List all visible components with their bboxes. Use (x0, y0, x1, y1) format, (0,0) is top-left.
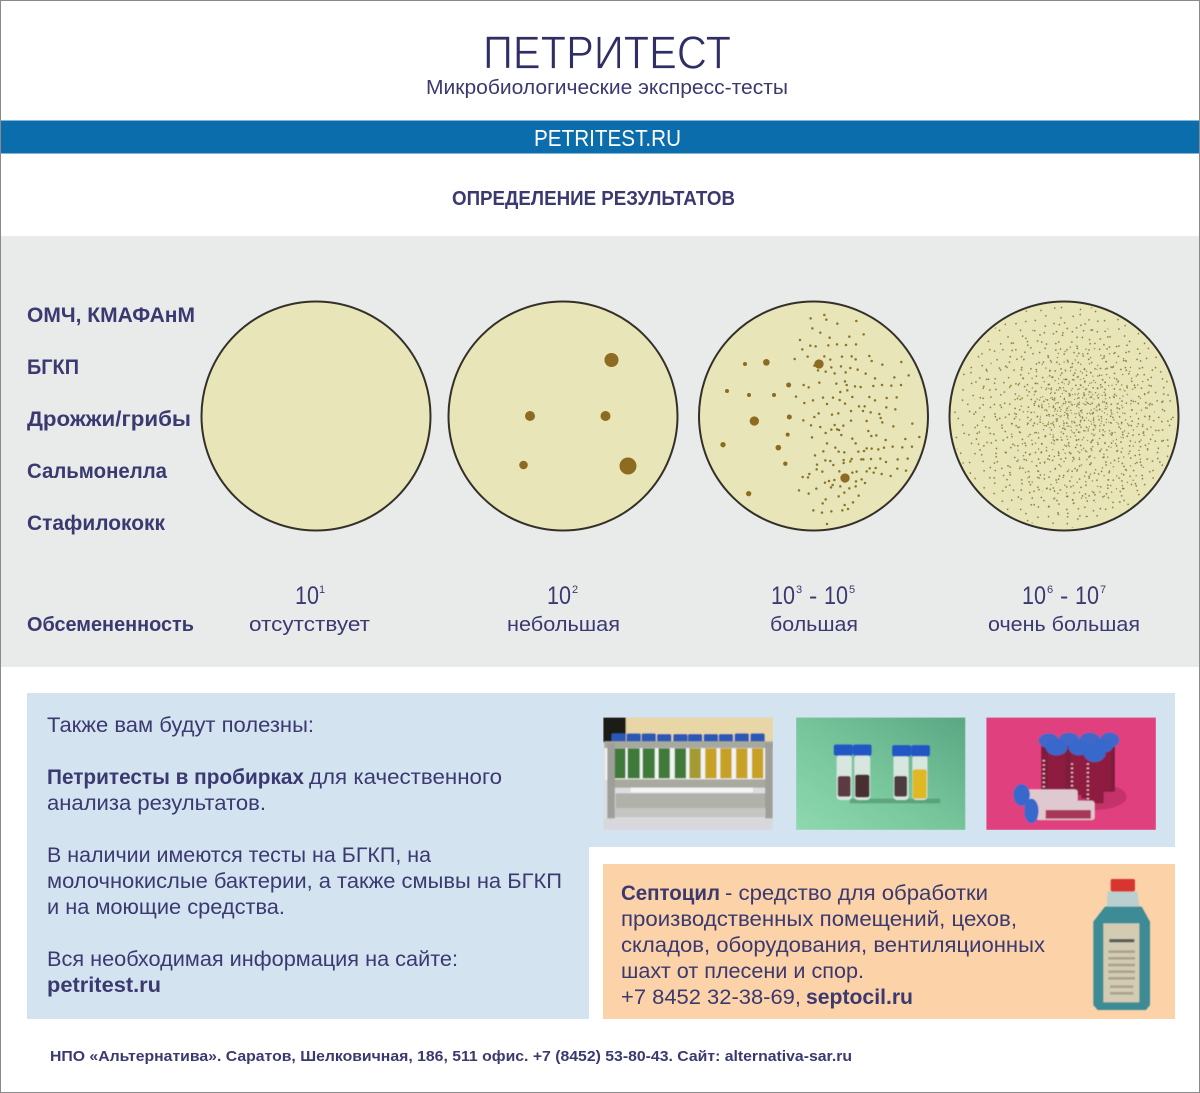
panel: septocil (603, 864, 1175, 1019)
panel: septocil: +7 8452 32-38-69, (621, 986, 801, 1009)
photo: tubes on pink (986, 717, 1156, 830)
panel: septocil: складов, оборудования, вентиляционных (621, 934, 1046, 957)
panel: also useful: молочнокислые бактерии, а также смывы на БГКП (47, 870, 562, 893)
column 1 value: 10 (295, 582, 319, 610)
test type labels: Стафилококк (27, 512, 165, 535)
photo: test tubes in rack (603, 717, 773, 830)
test type labels: ОМЧ, КМАФАнМ (27, 304, 195, 327)
panel: also useful: Вся необходимая информация на сайте: (47, 948, 458, 971)
title: ПЕТРИТЕСТ (483, 26, 731, 78)
contamination row (27, 582, 1140, 636)
petri dish: none (202, 302, 430, 530)
column 4 value: 6 (1047, 584, 1053, 596)
heading: results: ОПРЕДЕЛЕНИЕ РЕЗУЛЬТАТОВ (452, 188, 735, 210)
column 1 value: отсутствует (249, 614, 370, 636)
header (426, 26, 788, 99)
subtitle: Микробиологические экспресс-тесты (426, 77, 788, 99)
column 2 value: 10 (547, 582, 571, 610)
panel: also useful: Петритесты в пробирках (47, 766, 304, 789)
panel: photos (589, 693, 1175, 847)
column 4 value (988, 582, 1140, 636)
icon: septocil bottle (1093, 879, 1150, 1010)
petri dish: very many colonies (949, 301, 1179, 531)
column 3 value: 10 (824, 582, 848, 610)
column 4 value: очень большая (988, 614, 1140, 636)
column 3 value (770, 582, 858, 636)
column 2 value (507, 582, 620, 636)
column 2 value: 2 (572, 584, 578, 596)
column 2 value: небольшая (507, 614, 620, 636)
test type labels: Сальмонелла (27, 460, 167, 483)
panel: septocil: шахт от плесени и спор. (621, 960, 864, 983)
column 3 value: - (809, 582, 817, 610)
panel: also useful: для качественного (309, 766, 502, 789)
photo: four tubes on green (796, 717, 965, 830)
column 4 value: - (1060, 582, 1068, 610)
column 1 value (249, 582, 370, 636)
test type labels: БГКП (27, 356, 79, 379)
panel: septocil: - средство для обработки (725, 882, 988, 905)
test type labels (27, 304, 195, 535)
panel: also useful: В наличии имеются тесты на БГКП, на (47, 844, 431, 867)
panel: septocil: Септоцил (621, 882, 720, 905)
panel: also useful: и на моющие средства. (47, 896, 285, 919)
column 3 value: большая (770, 614, 858, 636)
label: contamination: Обсемененность (27, 614, 194, 636)
column 3 value: 3 (796, 584, 802, 596)
panel: results grey (1, 236, 1199, 667)
column 3 value: 5 (849, 584, 855, 596)
column 4 value: 10 (1075, 582, 1099, 610)
column 3 value: 10 (771, 582, 795, 610)
banner: site url: PETRITEST.RU (534, 125, 681, 151)
panel: also useful: petritest.ru (47, 974, 161, 997)
panel: also useful (27, 693, 589, 1019)
footer: НПО «Альтернатива». Саратов, Шелковичная, 186, 511 офис. +7 (8452) 53-80-43. Сайт: alternativa-sar.ru (50, 1048, 852, 1065)
panel: also useful: анализа результатов. (47, 792, 266, 815)
panel: also useful: Также вам будут полезны: (47, 714, 314, 737)
panel: septocil: производственных помещений, цехов, (621, 908, 1017, 931)
panel: septocil: septocil.ru (806, 986, 913, 1009)
column 4 value: 10 (1022, 582, 1046, 610)
banner: site url (1, 120, 1199, 154)
column 1 value: 1 (319, 584, 325, 596)
petri dish: few colonies (448, 302, 678, 530)
column 4 value: 7 (1100, 584, 1106, 596)
test type labels: Дрожжи/грибы (27, 408, 191, 431)
petri dish: many colonies (699, 302, 928, 530)
